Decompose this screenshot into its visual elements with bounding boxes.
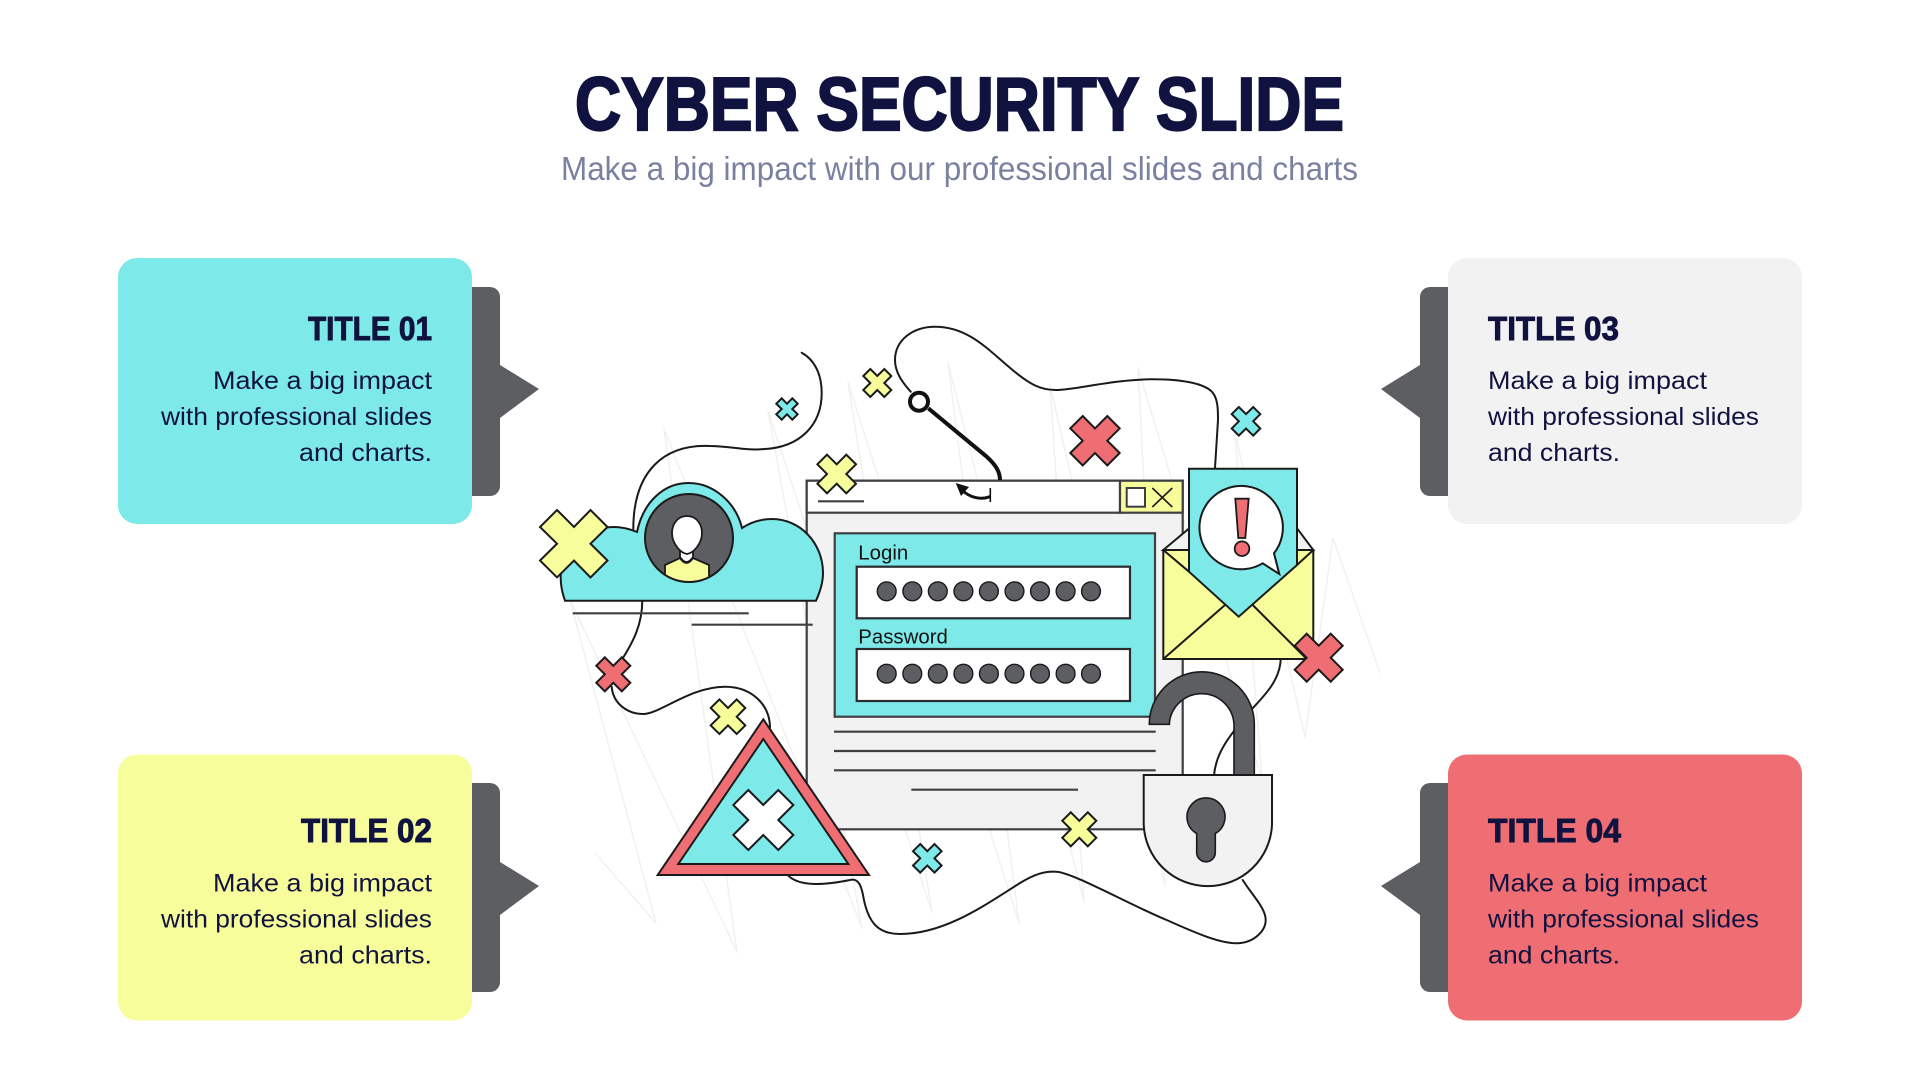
card 02 bbox=[118, 754, 472, 1020]
illustration: cyber security scene bbox=[540, 327, 1380, 952]
icon: cloud with user bbox=[561, 483, 823, 601]
title bar bbox=[807, 481, 1120, 513]
cross: yellow bottom bbox=[1062, 812, 1096, 846]
connecting line: cloud to red cross bbox=[622, 600, 642, 660]
body 03: and charts. bbox=[1488, 439, 1620, 467]
cloud bbox=[561, 483, 823, 601]
cross: cyan bottom bbox=[913, 844, 942, 873]
cross: cyan right bbox=[1232, 407, 1260, 436]
body 04: and charts. bbox=[1488, 942, 1620, 970]
cross: yellow above triangle bbox=[711, 699, 745, 734]
login form panel bbox=[835, 533, 1155, 717]
body 01: with professional slides bbox=[160, 403, 432, 431]
heading 04: TITLE 04 bbox=[1488, 813, 1621, 850]
pointer tab 04 bbox=[1381, 783, 1448, 992]
body 04: Make a big impact bbox=[1488, 870, 1707, 898]
cross: white in triangle bbox=[733, 790, 793, 850]
heading 01: TITLE 01 bbox=[308, 311, 432, 348]
body 02: Make a big impact bbox=[213, 870, 432, 898]
cross: red right bbox=[1295, 634, 1343, 682]
body 01 bbox=[160, 367, 432, 467]
login field bbox=[857, 567, 1130, 618]
lock body bbox=[1144, 775, 1272, 886]
connecting line: envelope to lock bbox=[1214, 659, 1281, 775]
card 04 bbox=[1448, 754, 1802, 1020]
cross: red left bbox=[596, 657, 630, 691]
cross: yellow on window bbox=[817, 455, 856, 493]
subtitle: Make a big impact with our professional slides and charts bbox=[561, 150, 1358, 187]
speech bubble bbox=[1199, 486, 1283, 574]
connecting line: red cross to triangle bbox=[612, 687, 770, 728]
window buttons bbox=[1120, 481, 1183, 513]
body 01: Make a big impact bbox=[213, 367, 432, 395]
faint background zigzag bbox=[570, 363, 1380, 952]
panel: title 01 bbox=[118, 258, 539, 524]
body 03 bbox=[1487, 367, 1759, 467]
pointer tab 01 bbox=[472, 287, 539, 496]
body 02 bbox=[160, 870, 432, 970]
cross: red top bbox=[1070, 416, 1120, 465]
window body bbox=[807, 481, 1183, 829]
password label: Password bbox=[858, 626, 948, 648]
body 02: with professional slides bbox=[160, 906, 432, 934]
pointer tab 03 bbox=[1381, 287, 1448, 496]
body 03: with professional slides bbox=[1487, 403, 1759, 431]
body 01: and charts. bbox=[299, 439, 432, 467]
exclamation mark bbox=[1235, 499, 1249, 556]
card 03 bbox=[1448, 258, 1802, 524]
text lines bbox=[834, 732, 1156, 790]
body 04 bbox=[1487, 870, 1759, 970]
heading 02: TITLE 02 bbox=[301, 813, 432, 850]
icon: envelope with alert bbox=[1163, 469, 1313, 659]
heading 03: TITLE 03 bbox=[1488, 311, 1619, 348]
title: CYBER SECURITY SLIDE bbox=[575, 62, 1344, 146]
connecting line: triangle to lock bbox=[788, 872, 1266, 943]
cloud underlines bbox=[573, 613, 813, 625]
cross: yellow top bbox=[863, 369, 891, 397]
login label: Login bbox=[858, 542, 908, 564]
envelope body bbox=[1163, 550, 1313, 659]
cross: small cyan left bbox=[776, 398, 798, 420]
body 03: Make a big impact bbox=[1488, 367, 1707, 395]
icon: open padlock bbox=[1144, 672, 1272, 886]
panel: title 02 bbox=[118, 754, 539, 1020]
body 02: and charts. bbox=[299, 942, 432, 970]
pointer tab 02 bbox=[472, 783, 539, 992]
title bar line bbox=[818, 500, 864, 502]
login window bbox=[807, 481, 1183, 829]
decorative crosses bbox=[540, 369, 1343, 873]
password field bbox=[857, 649, 1130, 701]
envelope folds bbox=[1163, 550, 1313, 659]
body 04: with professional slides bbox=[1487, 906, 1759, 934]
keyhole bbox=[1187, 798, 1225, 862]
connecting line: cloud to top bbox=[633, 353, 822, 530]
letter bbox=[1189, 469, 1297, 617]
envelope back flap bbox=[1163, 529, 1313, 550]
panel: title 04 bbox=[1381, 754, 1802, 1020]
shackle bbox=[1149, 672, 1254, 775]
card 01 bbox=[118, 258, 472, 524]
panel: title 03 bbox=[1381, 258, 1802, 524]
connecting line: fishing line to envelope bbox=[895, 327, 1218, 468]
cross: large yellow bbox=[540, 510, 608, 577]
avatar bbox=[645, 494, 733, 590]
icon: fishing hook bbox=[910, 393, 1000, 502]
icon: warning triangle bbox=[658, 719, 869, 875]
